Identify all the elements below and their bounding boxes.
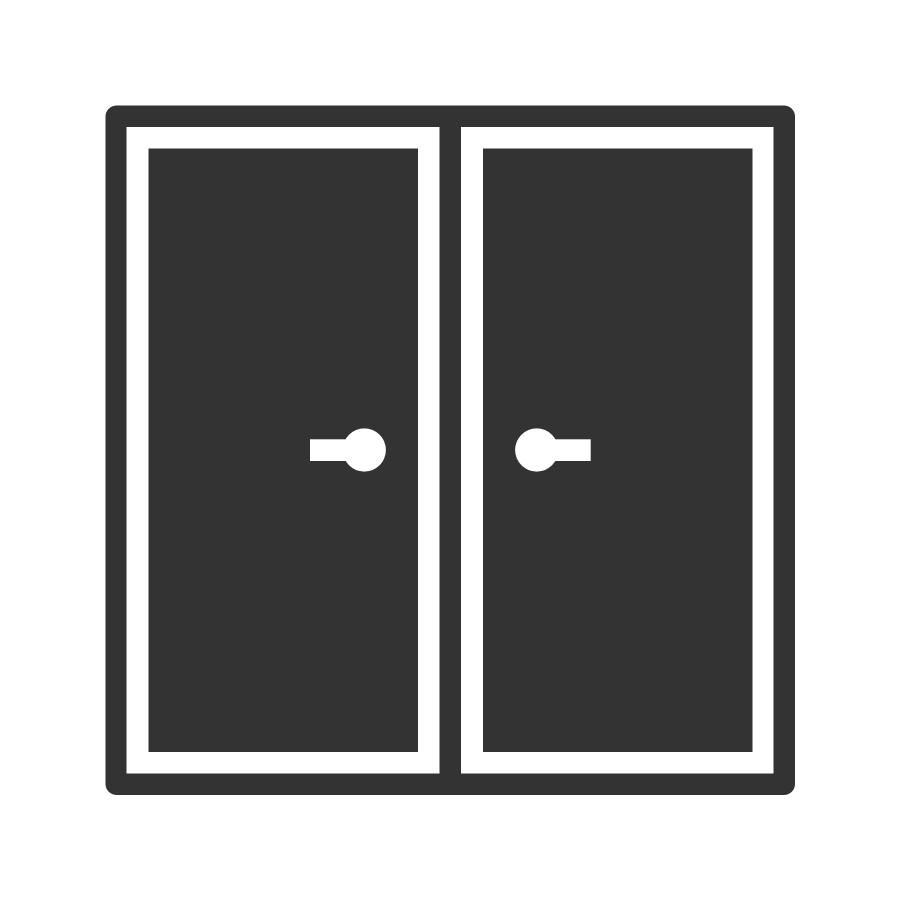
left door surround xyxy=(126,127,440,774)
right door xyxy=(461,127,774,774)
left door panel xyxy=(148,148,418,752)
right door surround xyxy=(461,127,774,774)
left door handle xyxy=(310,428,386,472)
right door panel xyxy=(483,148,752,752)
door frame xyxy=(106,106,795,795)
left door xyxy=(126,127,440,774)
right door handle xyxy=(515,428,591,472)
